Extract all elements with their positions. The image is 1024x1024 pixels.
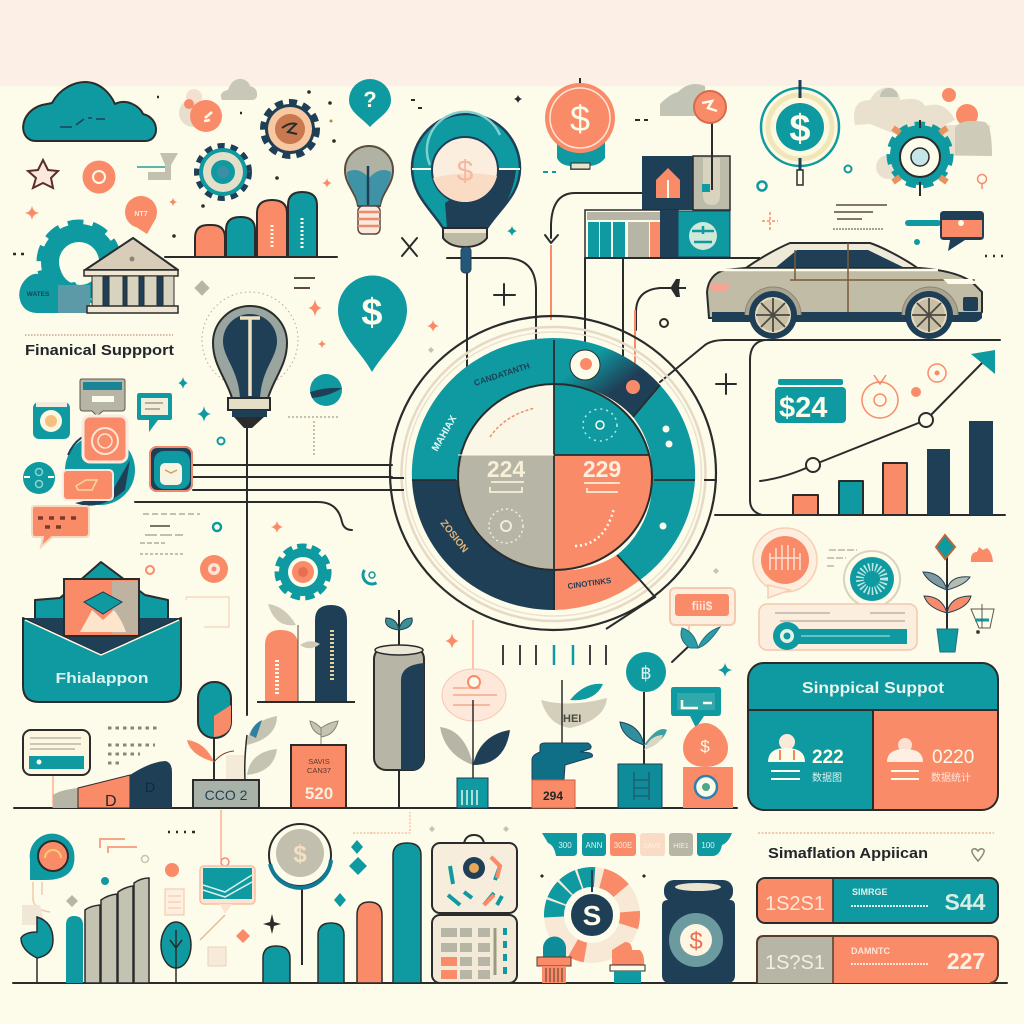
icon: question pin: ?: [363, 87, 377, 112]
icon: grey cloud: [221, 79, 257, 100]
heading: simulation application: Simaflation Appiican: [768, 845, 928, 862]
card: savings: [291, 721, 346, 808]
card: savings: SAVIS: [308, 757, 330, 766]
row: value one: 1S2S1: [765, 893, 825, 915]
icon: money bag: [862, 375, 898, 418]
icon: plus right: [716, 374, 736, 394]
stat right: 0220: [932, 747, 974, 768]
node markers: [570, 350, 600, 380]
chart: circular diagram: CINOTINKS: [567, 576, 613, 591]
dashed arcs: [489, 408, 617, 546]
icon: suitcase and calculator: [432, 835, 517, 983]
slider panel: [759, 604, 917, 650]
icon: plant with coin: [618, 652, 667, 808]
icon: big teal gear with blob: WATES: [27, 291, 50, 298]
icon: flag and hand: 294: [543, 789, 563, 803]
icon: heart: [972, 849, 984, 861]
dotted text block: [108, 728, 160, 763]
icon: building blocks: [585, 156, 760, 258]
panel: simplified support: [748, 663, 998, 810]
chart: growth bars: [760, 350, 995, 515]
icon: funnel: [137, 153, 178, 180]
tab row: ANN: [586, 841, 603, 850]
icon: dollar target: $: [789, 108, 811, 150]
icon: plus left: [494, 284, 515, 305]
row: value one: [757, 878, 998, 923]
row: value two: [757, 936, 998, 983]
icon: cloud and coral pin: [660, 84, 726, 190]
tab row: HIE1: [673, 843, 689, 850]
chart: circular diagram: [390, 316, 717, 630]
icon: chat box right: [905, 211, 984, 251]
outer ring: [390, 316, 716, 630]
row: value two: 227: [947, 948, 985, 974]
icon: small rings: [146, 319, 668, 587]
icon: dollar gauge: [541, 868, 645, 962]
icon: tree two: [161, 922, 191, 983]
icon: savings jar: $: [689, 928, 703, 955]
icon: teal circle dots: [23, 462, 55, 494]
icon: coral tab: [63, 470, 113, 500]
icon: coral cloud: [971, 547, 993, 562]
ring segment: navy bottom left: [412, 480, 555, 610]
row: value two: DAMNTC: [851, 946, 890, 956]
icon: person left: [768, 734, 805, 762]
mini bars with leaf: [257, 604, 355, 703]
icon: leaves and pot: [440, 700, 510, 808]
icon: coral hand: [610, 942, 645, 983]
ring labels: MAHIAX: [430, 414, 459, 454]
icon: dollar target: [761, 80, 839, 185]
icon: teal sprout: [681, 627, 720, 648]
icon: pale coral sign: [442, 669, 506, 721]
icon: big light bulb with dollar: [412, 112, 520, 273]
icon: coral tile: [83, 416, 127, 462]
dotted corner note: [288, 417, 340, 455]
chart: circular diagram: ZOSION: [438, 518, 470, 555]
connector lines: [13, 193, 1007, 983]
icon: grey coin: [269, 824, 331, 965]
dotted divider: [758, 832, 994, 834]
icon: question pin: [349, 79, 391, 127]
card: savings: CAN37: [307, 766, 331, 775]
icon: teal pin gauge: [30, 834, 74, 912]
icon: dollar pin teal: $: [361, 292, 383, 334]
icon: plane arrow: [660, 279, 686, 297]
card: promo chips: [753, 528, 917, 650]
icon: teal chat and coral egg: $: [700, 737, 710, 756]
coral label tag: fiii$: [692, 599, 713, 613]
tab row: 100: [701, 841, 715, 850]
card: slider note: [23, 730, 90, 775]
row: value one: SIMRGE: [852, 887, 888, 897]
lines: [827, 550, 857, 566]
panel: simplified support: 数据统计: [931, 771, 971, 784]
icon: half teal circle: [310, 374, 342, 406]
chart: circular diagram: CANDATANTH: [473, 360, 531, 388]
stepped shape: D: [145, 779, 155, 795]
tab row: 300: [558, 841, 572, 850]
bar chart: bottom centre: [263, 843, 421, 983]
dark dots row: [168, 831, 195, 833]
icon: coral coin: [545, 78, 615, 170]
icon: flag and hand: HEI: [563, 713, 581, 725]
decorative sparkles: [13, 90, 732, 677]
teal tick marks: [554, 645, 573, 665]
stepped shape: D: [105, 793, 117, 810]
ring segment: teal right: [633, 385, 695, 480]
stepped shape: [53, 761, 172, 810]
tab row: SAVE: [643, 843, 661, 850]
accents: [66, 833, 375, 966]
icon: coral label bubble: [125, 196, 157, 234]
icon: coral chat: [32, 506, 89, 547]
icon: tall pod tree: CCO 2: [205, 787, 248, 803]
icon: teal stamp: [537, 936, 571, 983]
icon: coral ring circle: [200, 555, 228, 583]
icon: orange gear: [263, 102, 317, 156]
right segment dots: [660, 426, 672, 530]
card: savings: 520: [305, 784, 333, 803]
cloud: [23, 82, 156, 141]
icon: person right: [887, 738, 923, 762]
icon: dollar pin teal: [338, 276, 407, 372]
tab row: 300E: [614, 841, 632, 850]
icon: potted plant right: [923, 535, 971, 652]
icon: coral speech: [753, 528, 817, 598]
icon: coral circle: [82, 160, 116, 194]
icon: mortarboard envelope: [23, 562, 181, 702]
ring segment: coral bottom: [555, 555, 640, 610]
dotted connector: [370, 812, 410, 833]
icon: flag and hand: [532, 680, 607, 808]
icon: bank building: [84, 238, 178, 313]
inner quadrants: [455, 380, 654, 575]
icon: linked box: [149, 446, 193, 492]
icon: sprout cylinder: [374, 610, 424, 770]
ring segment: teal to navy top right: [553, 338, 660, 417]
icon: left light bulb: [202, 292, 298, 428]
left icon cluster: [23, 379, 193, 547]
icon: tall pod tree: [187, 682, 277, 808]
icon: teal chat: [137, 393, 172, 432]
icon: cross mark: [402, 238, 417, 256]
coral brackets: [100, 839, 137, 853]
icon: teal badge: [844, 551, 900, 607]
stat left: 222: [812, 747, 844, 768]
panel: simplified support: 数据图: [812, 771, 842, 784]
heading: financial support: Finanical Suppport: [25, 342, 174, 359]
grey sparkles: [428, 347, 719, 832]
tick marks: [503, 645, 606, 665]
coral label tag: [670, 588, 735, 640]
icon: peach bubbles: [179, 89, 222, 132]
icon: plant with coin: ฿: [640, 663, 652, 683]
dotted divider: [25, 334, 173, 336]
bar chart: top left: [195, 192, 317, 257]
icon: teal gear: [197, 146, 249, 198]
ring segment: teal left: [412, 338, 553, 480]
icon: pale certificate: [186, 597, 229, 627]
value: 224: 224: [487, 456, 525, 482]
icon: tree one: [21, 905, 53, 983]
icon: envelope chat: [200, 858, 255, 940]
icon: grey card: [80, 379, 125, 416]
small text notes: [140, 514, 200, 554]
icon: teal gear with lens: [890, 120, 950, 196]
ring segment: teal lower right: [617, 480, 695, 580]
coral connector lines: [53, 245, 635, 860]
icon: savings jar: [662, 880, 735, 983]
icon: beige clouds: [854, 88, 992, 179]
icon: mortarboard envelope: Fhialappon: [56, 671, 148, 687]
icon: big light bulb with dollar: $: [457, 155, 474, 188]
value: 229: 229: [583, 456, 621, 482]
icon: dollar gauge: S: [583, 900, 601, 931]
heading: Sinppical Suppot: [802, 680, 945, 697]
icon: small light bulb: [345, 146, 393, 234]
icon: teal chat and coral egg: [671, 687, 733, 808]
icon: grey coin: $: [293, 841, 307, 868]
icon: teal camera tile: [33, 402, 70, 439]
tab row: [542, 833, 732, 856]
label: money tag: $24: [779, 392, 827, 424]
label: money tag: [775, 379, 846, 424]
icon: teal ring: [65, 433, 135, 506]
bar chart: bottom left steps: [66, 878, 149, 983]
icon: coral coin: $: [570, 98, 590, 139]
icon: big teal gear with blob: [19, 224, 117, 313]
icon: shopping cart: [971, 604, 994, 634]
row: value two: 1S?S1: [765, 952, 825, 974]
icon: coral label bubble: NT7: [134, 211, 148, 218]
icon: teal gear middle: [278, 547, 328, 597]
small accents top right: [758, 166, 1003, 256]
icon: target coral: [911, 364, 946, 397]
row: value one: S44: [945, 889, 986, 915]
icon: car: [707, 243, 982, 339]
icon: star: [28, 160, 58, 188]
